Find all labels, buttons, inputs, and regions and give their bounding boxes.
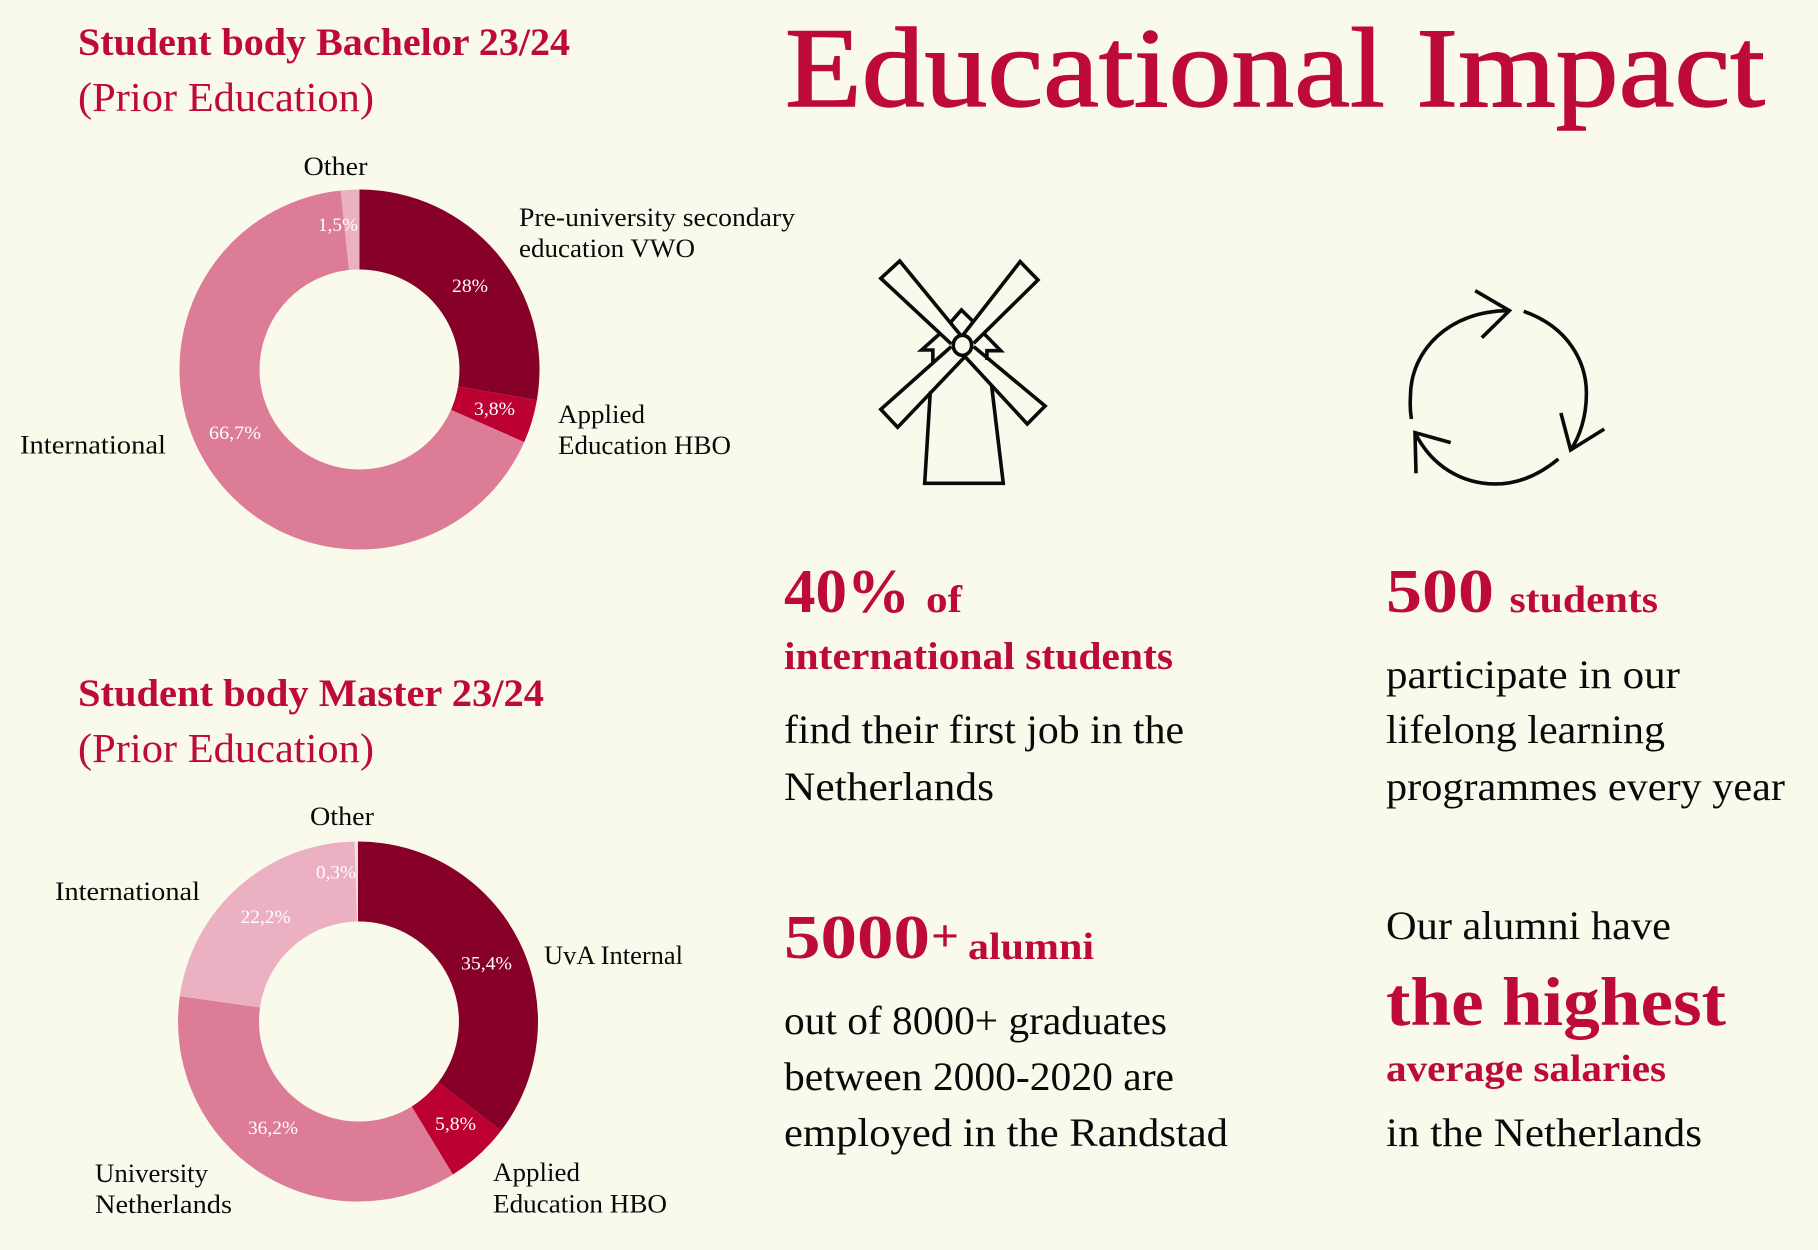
donut chart: master prior education: 35,4% xyxy=(461,954,512,975)
stat: highest average salaries: average salaries xyxy=(1386,1048,1666,1090)
stat: 40% of international students: 40% xyxy=(784,558,910,626)
stat: 500 students: participate in our xyxy=(1386,652,1680,697)
label: international: International xyxy=(20,430,166,460)
label: university Netherlands xyxy=(95,1159,232,1219)
label: UvA internal: UvA Internal xyxy=(544,941,683,970)
stat: 40% of international students: Netherlands xyxy=(784,764,994,809)
label: applied education HBO xyxy=(493,1158,667,1219)
stat: 500 students: lifelong learning xyxy=(1386,707,1665,752)
heading: bachelor: (Prior Education) xyxy=(78,74,374,120)
stat: 5000+ alumni xyxy=(784,904,1228,1155)
label: applied education HBO: Education HBO xyxy=(558,431,731,460)
label: pre-university secondary education VWO xyxy=(519,203,795,263)
stat: 500 students: 500 xyxy=(1386,558,1494,626)
heading: master xyxy=(78,672,544,771)
stat: 500 students: programmes every year xyxy=(1386,764,1785,809)
stat: 40% of international students: of xyxy=(926,579,964,621)
label: other: Other xyxy=(310,802,374,831)
stat: highest average salaries: the highest xyxy=(1386,964,1726,1040)
stat: 5000+ alumni: 5000 xyxy=(784,904,930,972)
donut chart: master prior education: 22,2% xyxy=(241,907,291,928)
stat: 5000+ alumni: out of 8000+ graduates xyxy=(784,998,1167,1043)
label: applied education HBO: Applied xyxy=(558,400,645,429)
heading: master: (Prior Education) xyxy=(78,725,374,771)
donut chart: bachelor prior education: 28% xyxy=(452,276,488,297)
donut chart: master prior education xyxy=(178,841,538,1202)
donut chart: bachelor prior education: 3,8% xyxy=(474,399,515,420)
panel: master student body xyxy=(55,672,683,1219)
donut chart: bachelor prior education xyxy=(179,190,540,550)
heading: bachelor xyxy=(78,21,570,120)
donut chart: master prior education: 5,8% xyxy=(435,1114,476,1135)
label: pre-university secondary education VWO: Pre-university secondary xyxy=(519,203,795,232)
label: university Netherlands: Netherlands xyxy=(95,1190,232,1219)
label: university Netherlands: University xyxy=(95,1159,208,1188)
stat: 40% of international students: find their first job in the xyxy=(784,707,1184,752)
label: applied education HBO xyxy=(558,400,731,460)
heading: master: Student body Master 23/24 xyxy=(78,672,544,715)
label: applied education HBO: Education HBO xyxy=(493,1190,667,1219)
stat: 5000+ alumni: between 2000-2020 are xyxy=(784,1054,1174,1099)
donut chart: bachelor prior education: 66,7% xyxy=(209,423,261,444)
stat: highest average salaries: in the Netherlands xyxy=(1386,1110,1702,1155)
stat: 40% of international students xyxy=(784,558,1184,809)
icon: cycle arrows xyxy=(1410,291,1604,484)
stat: 40% of international students: international students xyxy=(784,635,1173,678)
stat: 5000+ alumni: + xyxy=(931,910,959,961)
donut chart: master prior education: 0,3% xyxy=(316,862,356,884)
icon: windmill xyxy=(881,261,1045,483)
title: Educational Impact xyxy=(785,6,1765,131)
label: other: Other xyxy=(304,152,368,181)
label: applied education HBO: Applied xyxy=(493,1158,580,1187)
stat: 5000+ alumni: alumni xyxy=(968,926,1094,968)
heading: bachelor: Student body Bachelor 23/24 xyxy=(78,21,570,64)
donut chart: bachelor prior education: 1,5% xyxy=(318,215,358,236)
label: pre-university secondary education VWO: education VWO xyxy=(519,234,695,263)
panel: bachelor student body xyxy=(20,21,795,550)
stat: highest average salaries: Our alumni have xyxy=(1386,903,1671,948)
stat: highest average salaries xyxy=(1386,903,1726,1155)
stat: 5000+ alumni: employed in the Randstad xyxy=(784,1110,1228,1155)
donut chart: master prior education: 36,2% xyxy=(248,1118,298,1139)
label: international: International xyxy=(55,877,200,906)
stat: 500 students: students xyxy=(1510,579,1658,621)
stat: 500 students xyxy=(1386,558,1785,809)
